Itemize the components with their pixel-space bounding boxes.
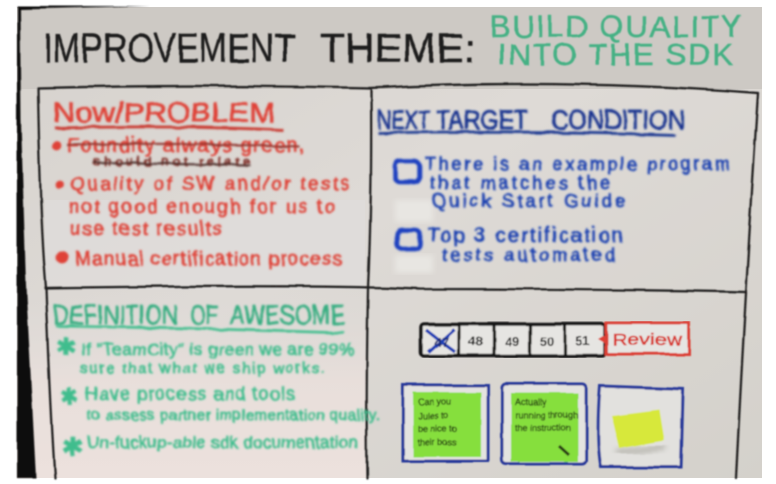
bullet: process and tools	[60, 384, 380, 424]
bullet: team city: sure that what we ship works.	[80, 360, 325, 377]
heading: definition of awesome: DEFINITION	[53, 300, 178, 330]
bullet: process and tools: ✱	[60, 384, 78, 409]
bullet: process and tools: Have process and tools	[85, 384, 295, 404]
heading: definition of awesome: OF	[190, 300, 218, 330]
review box	[598, 323, 689, 354]
sprint cells: 51	[576, 334, 590, 349]
bullet: documentation: Un-fuckup-able sdk documentation	[87, 433, 358, 452]
checkbox item one: that matches the	[430, 173, 610, 193]
panel: now / problem	[52, 97, 350, 270]
card one with green note	[403, 385, 488, 461]
card one with green note: be nice to	[418, 424, 457, 434]
heading underline	[378, 132, 675, 135]
sprint cells: 48	[469, 334, 483, 349]
heading: next target condition: NEXT	[377, 105, 430, 135]
dark left edge of the board	[17, 6, 150, 478]
heading: next target condition: CONDITION	[551, 105, 685, 135]
checkbox item two: tests automated	[442, 245, 615, 265]
title: improvement theme: IMPROVEMENT	[43, 25, 295, 71]
checkbox item one: Quick Start Guide	[432, 191, 625, 211]
sprint cells	[421, 324, 605, 356]
panel: next target condition	[377, 105, 730, 265]
panel: definition of awesome	[53, 300, 380, 462]
heading: definition of awesome: AWESOME	[230, 300, 345, 330]
bullet: manual certification: Manual certification process	[75, 249, 342, 270]
sprint cells: 47	[434, 334, 448, 349]
kanban cards	[403, 384, 683, 467]
subtitle: build quality into the sdk: INTO THE SDK	[498, 37, 733, 72]
heading: next target condition	[377, 105, 685, 135]
bullet: process and tools: to assess partner implementation quality.	[87, 407, 380, 424]
card one with green note: Can you	[418, 397, 452, 407]
sprint timeline	[421, 323, 689, 356]
bullet: quality: use test results	[70, 219, 222, 240]
card three with yellow note	[598, 386, 683, 467]
heading: next target condition: TARGET	[436, 105, 528, 135]
review box: Review	[612, 330, 683, 349]
card two with green note: running through	[515, 410, 578, 420]
checkbox item one	[395, 154, 730, 211]
sprint cells: 50	[540, 334, 554, 349]
card two with green note: the instruction	[515, 423, 571, 433]
heading: now/problem: Now/PROBLEM	[53, 97, 275, 128]
subtitle: build quality into the sdk	[490, 9, 742, 72]
bullet: quality: not good enough for us to	[69, 197, 335, 218]
checkbox item two	[397, 225, 623, 265]
card one with green note: their boss	[418, 438, 458, 448]
bullet: team city: ✱	[56, 334, 76, 361]
crossed-out bullet: Foundity always green,	[67, 135, 305, 157]
bullet: quality: Quality of SW and/or tests	[70, 174, 350, 195]
bullet: documentation	[62, 432, 358, 462]
board grid frame	[38, 84, 758, 478]
bullet: team city	[56, 334, 354, 377]
card two with green note: Actually	[515, 397, 547, 407]
heading underline	[55, 127, 283, 130]
card two with green note	[502, 384, 586, 464]
checkbox item one: There is an example program	[425, 154, 730, 174]
card one with green note: Jules to	[418, 411, 449, 421]
checkbox item two: Top 3 certification	[428, 225, 623, 247]
title: improvement theme: THEME:	[320, 25, 475, 71]
bullet: team city: If "TeamCity" is green we are 99%	[81, 340, 354, 359]
sprint cells: 49	[505, 334, 519, 349]
heading: definition of awesome	[53, 300, 345, 330]
bullet: quality	[56, 174, 350, 240]
crossed-out bullet	[52, 135, 305, 169]
bullet: documentation: ✱	[62, 432, 84, 462]
crossed-out bullet: should not relate	[94, 154, 250, 169]
subtitle: build quality into the sdk: BUILD QUALITY	[490, 9, 742, 44]
heading underline	[56, 326, 345, 333]
